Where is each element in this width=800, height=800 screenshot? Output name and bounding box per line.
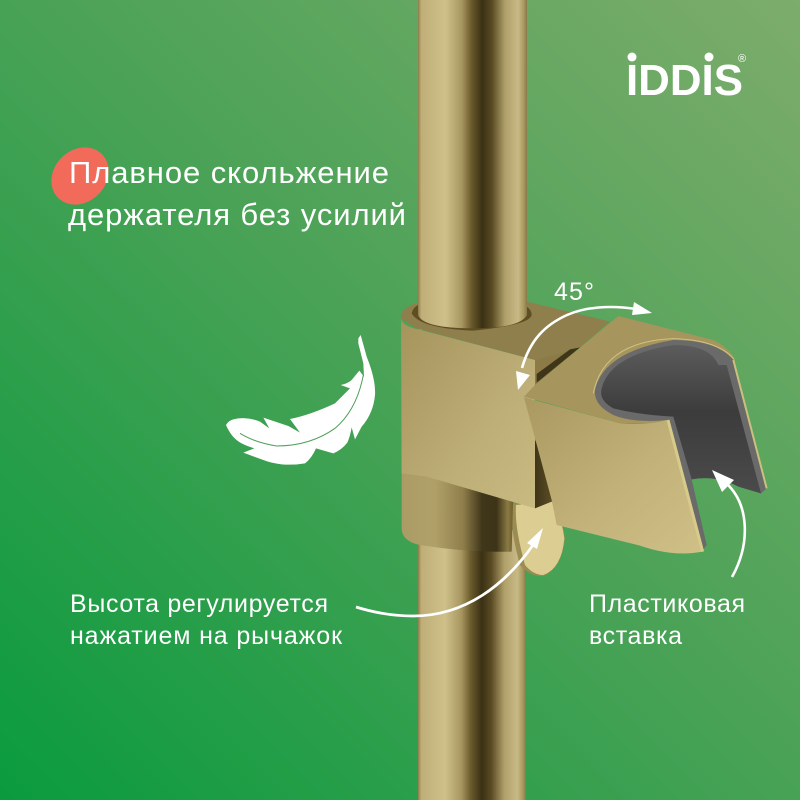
shadow under holder: [535, 440, 562, 508]
rod seated in collar: [412, 260, 532, 331]
label: plastic insert: Пластиковая: [589, 590, 745, 618]
holder front face: [524, 397, 703, 554]
shower rod: [418, 0, 527, 800]
label: lever: нажатием на рычажок: [70, 622, 343, 650]
45 degree label: 45°: [554, 278, 594, 306]
plastic insert: [593, 339, 767, 552]
lever: [512, 502, 565, 576]
heading: держателя без усилий: [68, 197, 406, 232]
label: plastic insert: [589, 590, 745, 650]
label: lever: Высота регулируется: [70, 590, 328, 618]
collar front face: [401, 319, 535, 508]
wedge between collar and holder: [535, 347, 580, 385]
collar lower section: [402, 427, 513, 552]
label: plastic insert: вставка: [589, 622, 682, 650]
heading: Плавное скольжение: [69, 155, 389, 190]
icon: feather: [226, 335, 375, 465]
logo: IDDIS: ®: [738, 53, 746, 65]
holder top face: [524, 316, 735, 423]
arrow: rotation 45 degrees: [516, 302, 652, 390]
brass slider holder product: [401, 260, 767, 576]
logo: IDDIS: IDDIS: [626, 56, 743, 105]
arrow: plastic insert: [712, 470, 745, 577]
accent blob: [40, 136, 120, 216]
arrow: lever: [356, 528, 543, 616]
label: lever: [70, 590, 343, 650]
heading: [68, 155, 406, 232]
collar top face: [401, 302, 610, 360]
